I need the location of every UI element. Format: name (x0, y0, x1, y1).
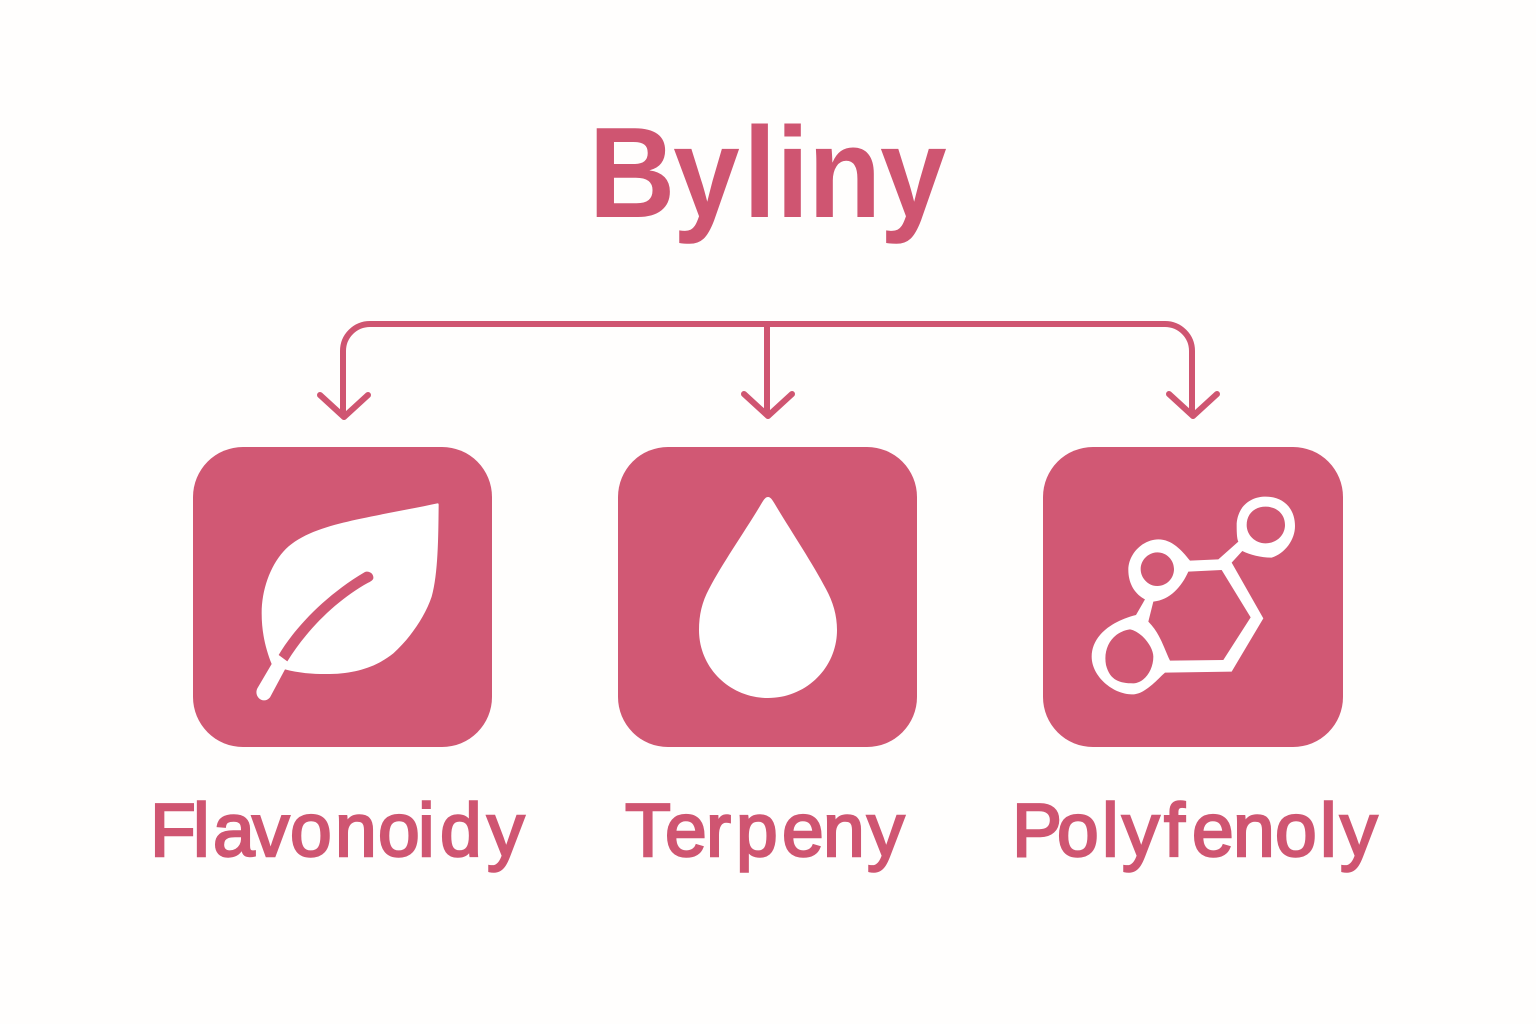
icon: leaf (256, 503, 439, 700)
panel: Polyfenoly (1043, 447, 1343, 747)
panel: Flavonoidy (193, 447, 492, 747)
connector arrows (320, 324, 1217, 417)
panel: Terpeny (618, 447, 917, 747)
label: Polyfenoly: Polyfenoly (1012, 788, 1378, 872)
title: Byliny (589, 101, 947, 245)
icon: molecule (1092, 497, 1295, 694)
label: Flavonoidy: Flavonoidy (150, 788, 525, 872)
label: Terpeny: Terpeny (625, 788, 905, 872)
icon: drop (699, 497, 837, 698)
